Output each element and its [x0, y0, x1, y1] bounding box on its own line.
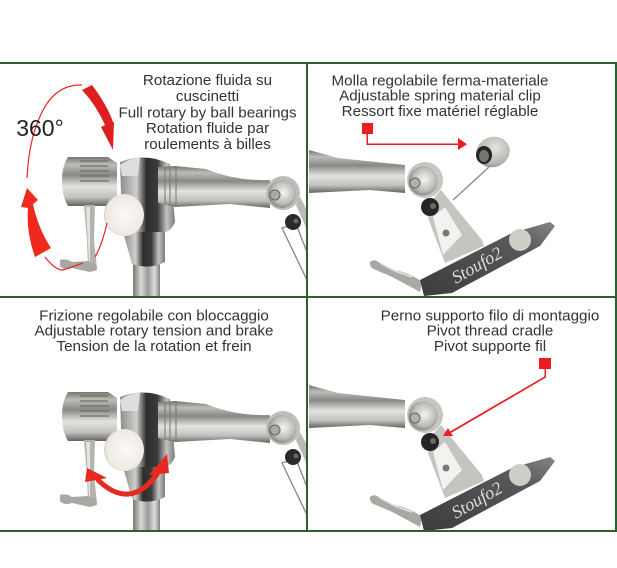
text: thread cradle caption: Perno supporto filo di montaggio	[381, 308, 599, 324]
image: vise jaws	[309, 150, 555, 296]
text: spring clip caption: Molla regolabile ferma-materiale	[332, 72, 548, 90]
image: vise head with brake	[60, 392, 308, 532]
arrow: spring clip pointer	[362, 123, 467, 150]
image: vise head with handle	[60, 157, 308, 297]
panel: spring clip	[309, 72, 555, 296]
arrow: thread cradle pointer	[443, 358, 551, 436]
text: full rotary caption: Rotazione fluida su	[143, 72, 272, 89]
panel: rotary tension	[35, 308, 308, 532]
text: spring clip caption: Ressort fixe matériel réglable	[342, 103, 538, 120]
text: full rotary caption: cuscinetti	[176, 88, 239, 105]
arrow: double-headed rotation	[85, 454, 169, 494]
panel: thread cradle	[309, 308, 599, 531]
text: rotary tension caption: Tension de la rotation et frein	[56, 338, 252, 355]
text: thread cradle caption: Pivot supporte fil	[434, 338, 546, 355]
image: vise jaws with cradle	[309, 385, 555, 531]
text: spring clip caption: Adjustable spring material clip	[339, 88, 541, 104]
text: rotary tension caption: Adjustable rotary tension and brake	[35, 322, 273, 340]
arrow: rotation bottom	[21, 188, 51, 257]
text: thread cradle caption: Pivot thread cradle	[427, 322, 553, 340]
text: full rotary caption: Full rotary by ball bearings	[118, 104, 297, 122]
image: spring wire and clip	[453, 132, 514, 200]
arrow: rotation top	[82, 85, 114, 150]
label: 360 degrees: 360°	[16, 115, 64, 141]
text: full rotary caption: roulements à billes	[144, 136, 271, 153]
rotation ellipse	[27, 85, 107, 270]
text: rotary tension caption: Frizione regolabile con bloccaggio	[39, 308, 269, 324]
text: full rotary caption: Rotation fluide par	[146, 120, 269, 137]
panel: full rotary	[16, 72, 308, 297]
